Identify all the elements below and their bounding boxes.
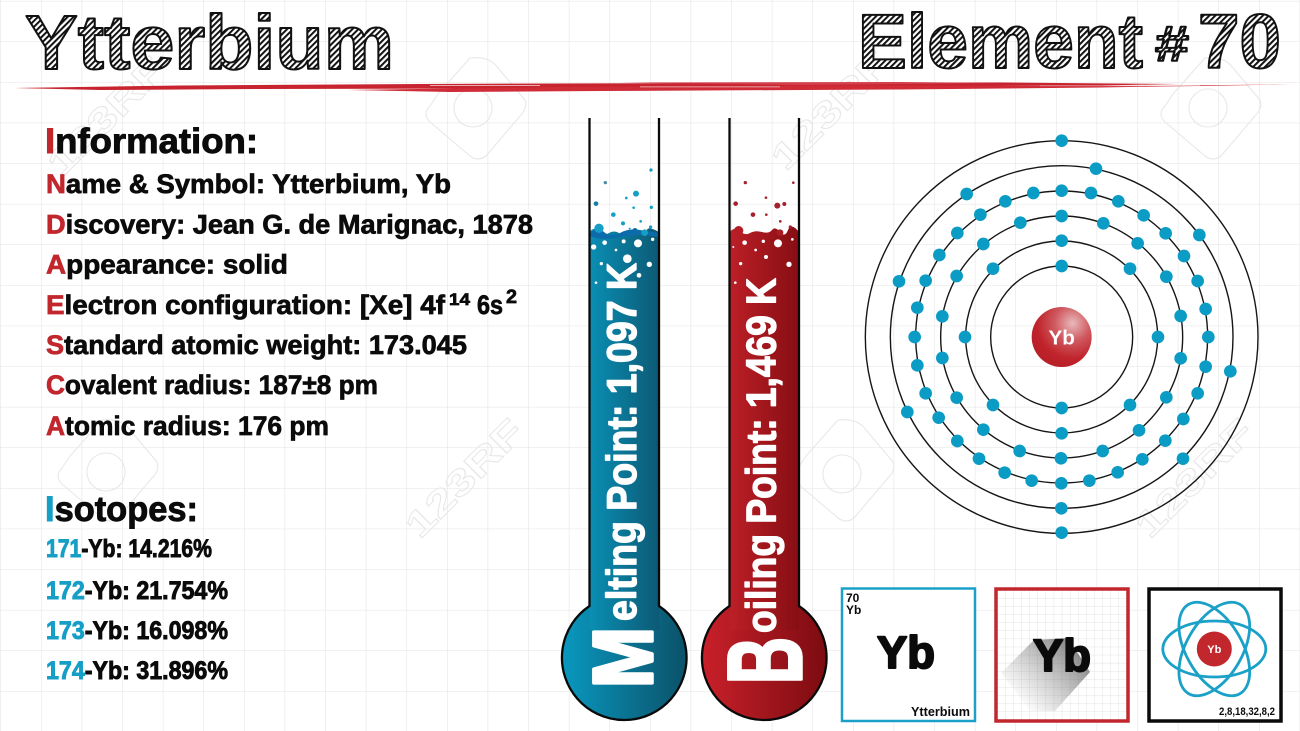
card: periodic table tile	[842, 588, 975, 721]
panel: isotopes	[45, 490, 228, 685]
card: periodic table tile: 70	[846, 591, 860, 605]
appearance: Appearance: solid	[46, 250, 288, 280]
electron configuration: 14	[449, 290, 471, 309]
electron configuration: Electron configuration: [Xe] 4f	[46, 290, 445, 320]
atomic radius: Atomic radius: 176 pm	[46, 411, 329, 441]
card: atom icon	[1149, 589, 1281, 721]
title: Element #70: Element	[858, 0, 1143, 85]
thermometer: melting point: elting Point: 1,097 K	[598, 263, 645, 621]
card: long shadow symbol: Yb	[1033, 630, 1091, 681]
thermometer: melting point	[562, 118, 687, 720]
discovery: Discovery: Jean G. de Marignac, 1878	[46, 210, 533, 240]
electron configuration: 2	[506, 287, 517, 308]
panel: information	[45, 122, 533, 441]
watermarks	[39, 43, 1262, 546]
isotope 171: 171-Yb: 14.216%	[46, 535, 212, 563]
standard atomic weight: Standard atomic weight: 173.045	[46, 330, 467, 360]
red brush underline	[14, 82, 1290, 92]
watermarks: 123RF	[763, 43, 898, 178]
title: Element #70: 70	[1198, 0, 1281, 85]
isotope 173: 173-Yb: 16.098%	[46, 617, 228, 645]
card: atom icon: 2,8,18,32,8,2	[1219, 706, 1275, 718]
isotope 172: 172-Yb: 21.754%	[46, 577, 228, 605]
atom diagram: Bohr model	[865, 134, 1258, 539]
title: Element #70: #	[1155, 16, 1189, 72]
thermometer: boiling point	[701, 118, 827, 720]
covalent radius: Covalent radius: 187±8 pm	[46, 370, 378, 400]
watermarks: 123RF	[1127, 411, 1262, 546]
thermometer: melting point: M	[576, 627, 670, 688]
watermarks: 123RF	[397, 411, 532, 546]
heading: Isotopes: Isotopes:	[45, 490, 198, 529]
card: periodic table tile: Ytterbium	[911, 704, 970, 719]
electron configuration: 6s	[477, 290, 503, 320]
title: Ytterbium: Ytterbium	[25, 0, 394, 86]
thermometer: boiling point: oiling Point: 1,469 K	[738, 278, 785, 633]
card: atom icon: Yb	[1207, 644, 1222, 656]
atom diagram: Bohr model: Yb	[1048, 326, 1075, 349]
card: long shadow symbol	[996, 589, 1128, 721]
name and symbol: Name & Symbol: Ytterbium, Yb	[46, 169, 451, 199]
heading: Information: Information:	[45, 122, 258, 161]
card: periodic table tile: Yb	[846, 603, 861, 617]
watermarks: 123RF	[39, 49, 174, 184]
thermometer: boiling point: B	[707, 637, 824, 684]
card: periodic table tile: Yb	[877, 627, 935, 678]
isotope 174: 174-Yb: 31.896%	[46, 657, 228, 685]
